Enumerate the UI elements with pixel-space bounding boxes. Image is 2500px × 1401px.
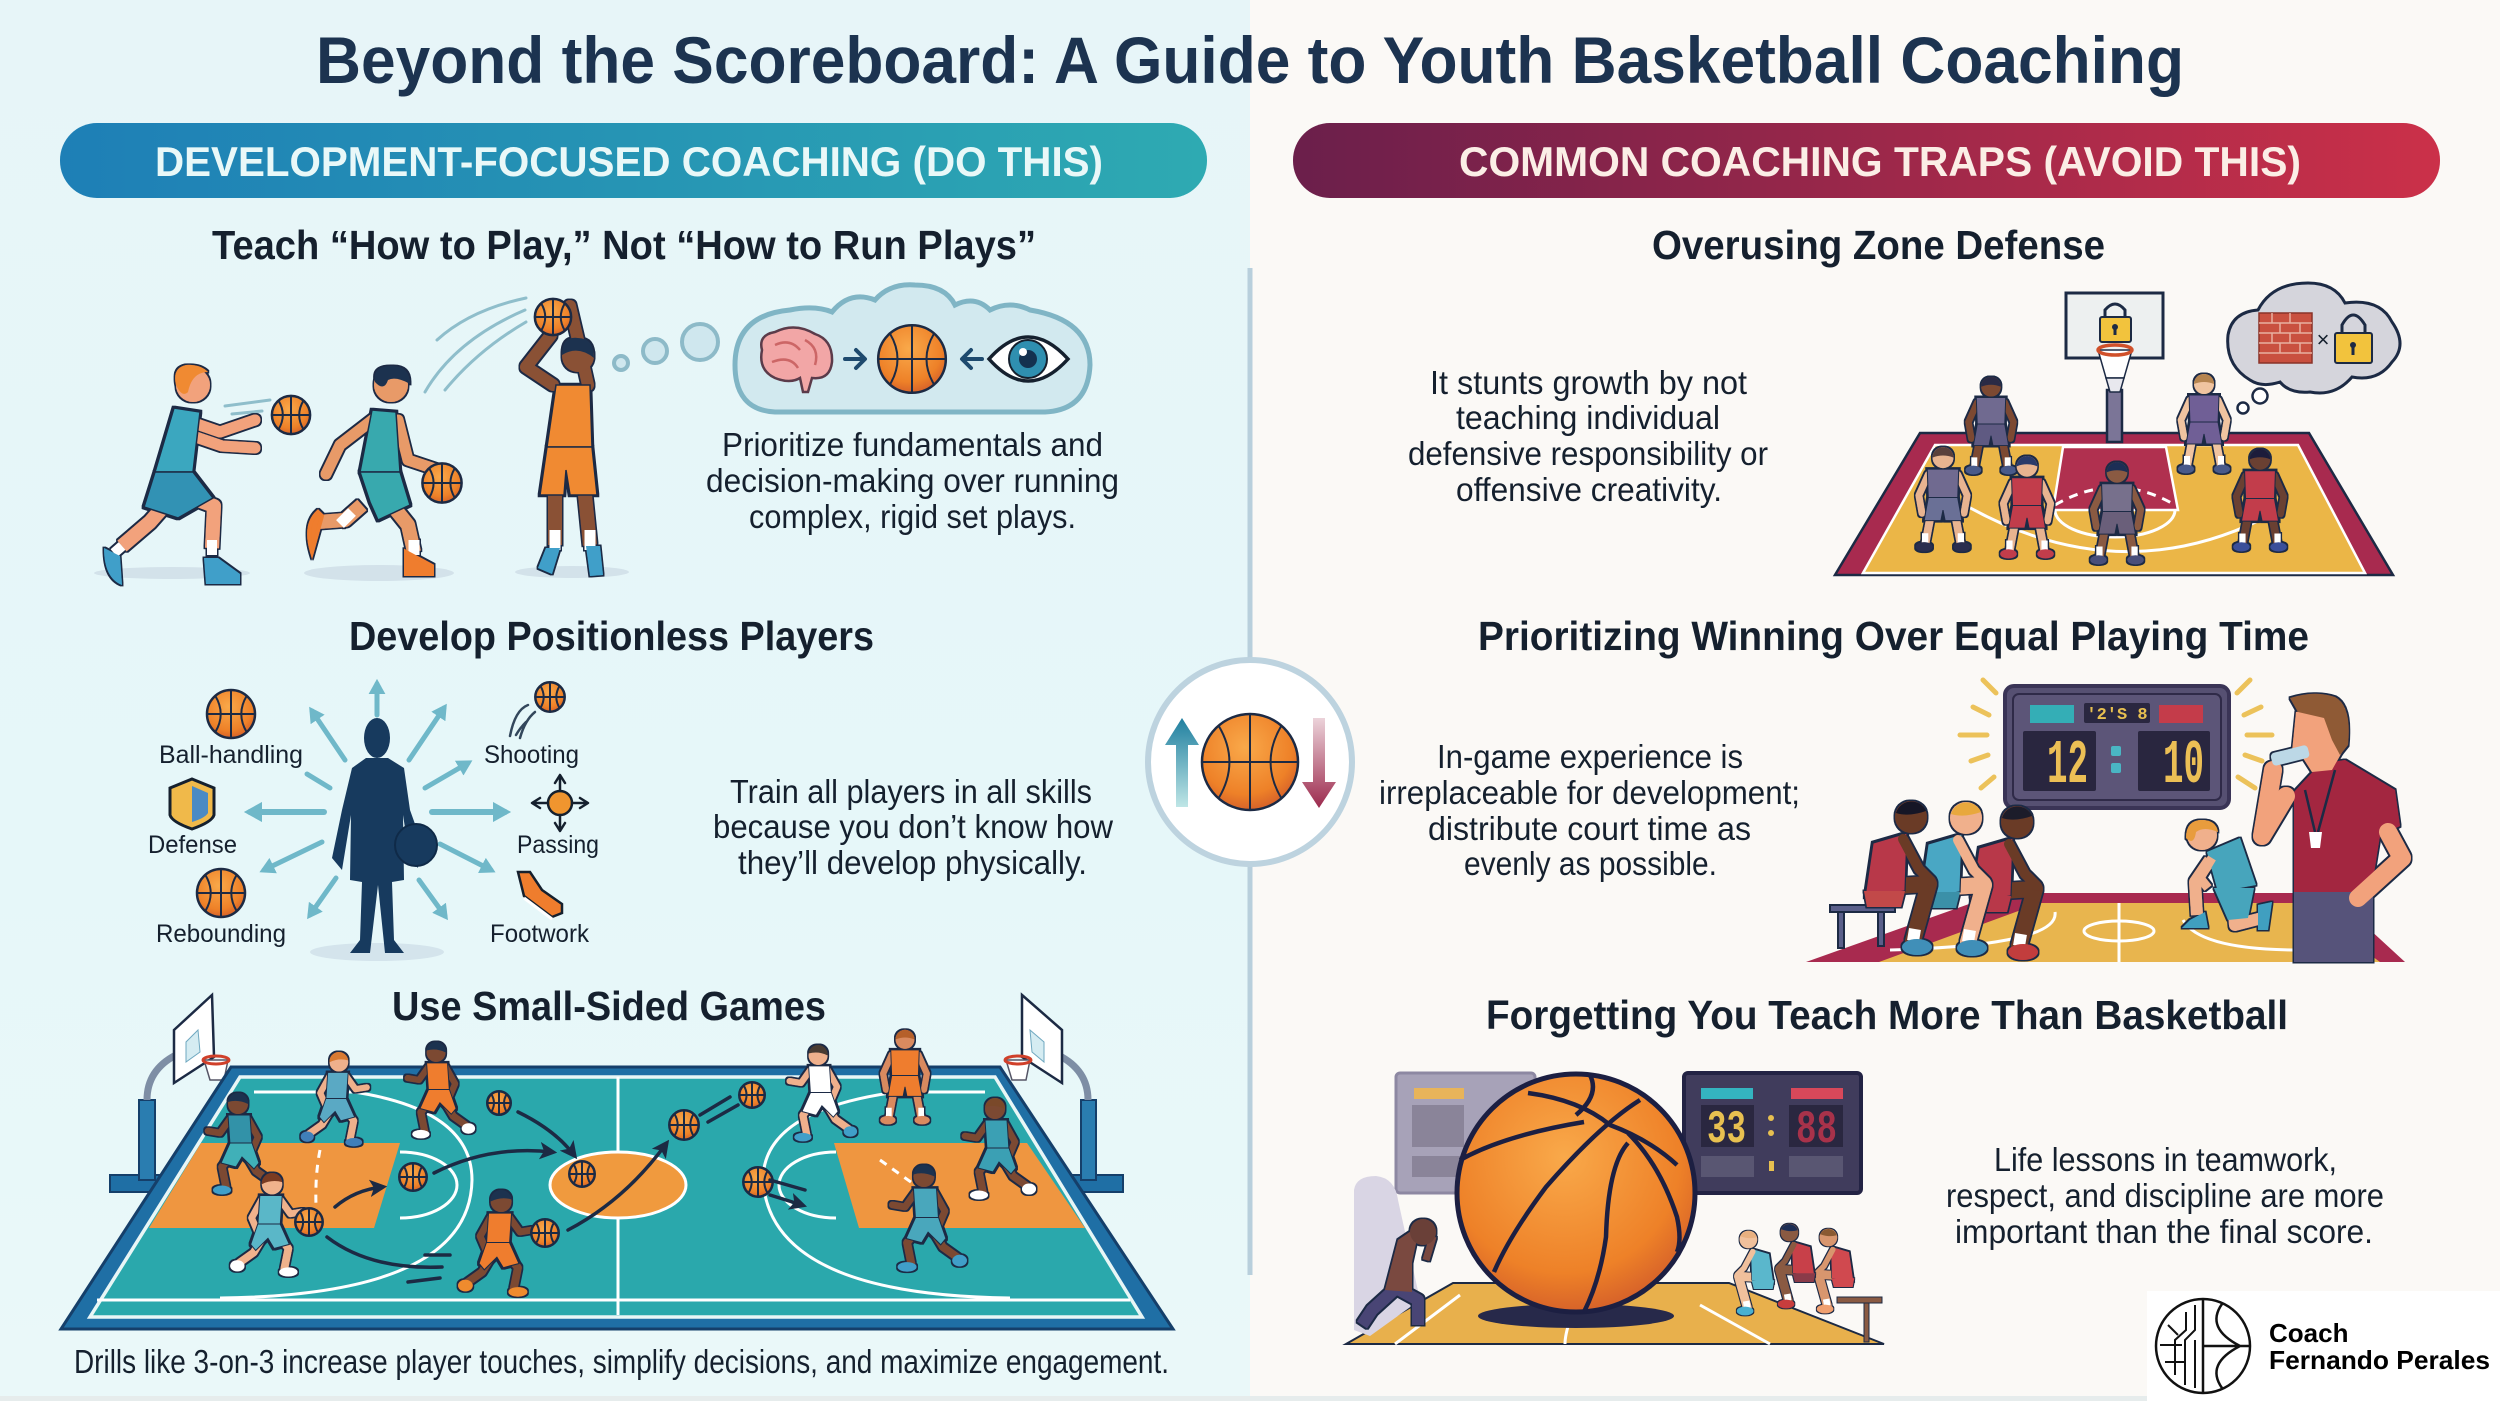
illustration: zone defense court [1835,283,2400,575]
skill: shooting [484,682,579,769]
movement arrows [327,1097,805,1282]
heading: prioritizing winning: Prioritizing Winning Over Equal Playing Time [1478,613,2309,659]
text: stunts growth: It stunts growth by not [1430,364,1747,401]
scoreboard rays [1960,680,2272,788]
skill: defense: Defense [148,831,237,859]
text: train all players: Train all players in all skills [730,773,1092,810]
logo text: Coach [2269,1318,2348,1348]
icon: brain [761,327,832,392]
bottom strip [0,1396,2147,1401]
logo: Coach Fernando Perales [2147,1291,2500,1401]
hoop: right [1005,995,1123,1192]
banner: avoid this: COMMON COACHING TRAPS (AVOID THIS) [1459,138,2301,185]
title: Beyond the Scoreboard: A Guide to Youth Basketball Coaching [316,23,2184,97]
text: prioritize fundamentals [706,426,1119,535]
logo text: Fernando Perales [2269,1345,2490,1375]
text: stunts growth: defensive responsibility or [1408,435,1768,472]
text: drills like 3-on-3: Drills like 3-on-3 increase player touches, simplify decisions, and maximize engagement. [74,1343,1169,1380]
icon: arrow right [845,350,865,368]
hoop with lock [2066,293,2163,442]
thought bubbles [614,324,718,370]
score: home: 12 [2047,730,2088,801]
arrow down [1302,718,1336,808]
heading: forgetting you teach: Forgetting You Teach More Than Basketball [1486,992,2288,1038]
text: life lessons [1946,1141,2384,1250]
logo text [2269,1318,2490,1375]
skill: footwork: Footwork [490,920,589,948]
thought cloud: wall and lock: × [2317,327,2329,352]
skill: passing: Passing [517,831,599,859]
coach with whistle [2262,694,2402,962]
banner: do this [60,123,1207,198]
illustration: scoreboard and coach [1806,680,2405,962]
text: stunts growth: offensive creativity. [1456,471,1722,508]
text: prioritize fundamentals: Prioritize fundamentals and [722,426,1103,463]
skill: rebounding: Rebounding [156,920,286,948]
scoreboard [1684,1073,1861,1193]
skill: passing [517,775,599,859]
skill: rebounding [156,869,286,948]
skill: defense [148,779,237,859]
icon: eye [989,337,1068,381]
shadow figure and coach [1354,1176,1436,1336]
defenders [1916,374,2287,565]
court [1835,433,2393,575]
center divider line [1248,268,1252,1275]
right panel background [1250,0,2500,1401]
player silhouette [310,718,444,961]
ball [1202,714,1298,810]
icon: ball [878,325,946,393]
text: in-game experience: distribute court time as [1428,810,1751,847]
court surface [61,1067,1173,1329]
scoreboard: '2'S 8 [2086,706,2148,725]
illustration: oversized basketball [1346,1073,1884,1344]
banner: do this: DEVELOPMENT-FOCUSED COACHING (DO THIS) [155,138,1103,185]
skill: shooting: Shooting [484,741,579,769]
panel: common coaching traps [1293,123,2440,1344]
text: stunts growth: teaching individual [1456,399,1720,436]
left panel background [0,0,1250,1401]
cloud: brain, ball, eye [735,285,1090,412]
heading: small-sided games: Use Small-Sided Games [392,983,826,1029]
skill: ball-handling: Ball-handling [159,741,303,769]
text: in-game experience [1379,738,1800,882]
kneeling player [2182,820,2272,930]
illustration: small-sided games court [61,995,1173,1329]
shadow [1478,1304,1674,1328]
text: in-game experience: evenly as possible. [1464,845,1717,882]
text: life lessons: important than the final score. [1955,1213,2373,1250]
floor [1346,1283,1884,1344]
center medallion: ball with arrows [1148,660,1352,864]
scoreboard [2005,686,2229,808]
balls [295,1082,773,1247]
illustration: three youth players [94,298,629,585]
text: stunts growth [1408,364,1768,508]
arrow up [1165,718,1199,807]
player passing [104,365,255,585]
thought cloud: wall and lock [2228,283,2400,414]
panel: development-focused coaching [60,123,1207,1380]
ball: dribbled [422,463,462,503]
bench players [1737,1224,1882,1342]
player shooting [526,306,603,576]
score: away: 10 [2163,730,2204,801]
ball: passed [272,396,310,434]
text: train all players [713,773,1113,881]
bench with seated players [1830,801,2038,960]
heading: teach how to play: Teach “How to Play,” Not “How to Run Plays” [212,222,1036,268]
skill: footwork [490,872,589,948]
text: prioritize fundamentals: decision-making over running [706,462,1119,499]
big basketball [1457,1074,1695,1312]
text: in-game experience: In-game experience is [1437,738,1743,775]
icon: arrow left [962,350,982,368]
text: train all players: they’ll develop physically. [738,844,1087,881]
heading: overusing zone defense: Overusing Zone Defense [1652,222,2105,268]
skill: ball-handling [159,690,303,769]
text: life lessons: Life lessons in teamwork, [1994,1141,2337,1178]
faded scoreboard [1396,1073,1535,1193]
hoop: left [110,995,229,1192]
players [208,1030,1036,1297]
text: life lessons: respect, and discipline are more [1946,1177,2384,1214]
heading: positionless players: Develop Positionless Players [349,613,874,659]
text: in-game experience: irreplaceable for development; [1379,774,1800,811]
ball: shot [535,299,571,335]
scoreboard: 88 [1796,1104,1837,1156]
logo icon [2156,1299,2250,1393]
radial arrows [250,684,505,916]
banner: avoid this [1293,123,2440,198]
text: train all players: because you don’t know how [713,808,1113,845]
floor [1806,893,2405,962]
diagram: positionless player skills [148,682,599,961]
player dribbling [309,366,438,574]
text: prioritize fundamentals: complex, rigid set plays. [749,498,1076,535]
scoreboard: 33 [1707,1104,1746,1156]
